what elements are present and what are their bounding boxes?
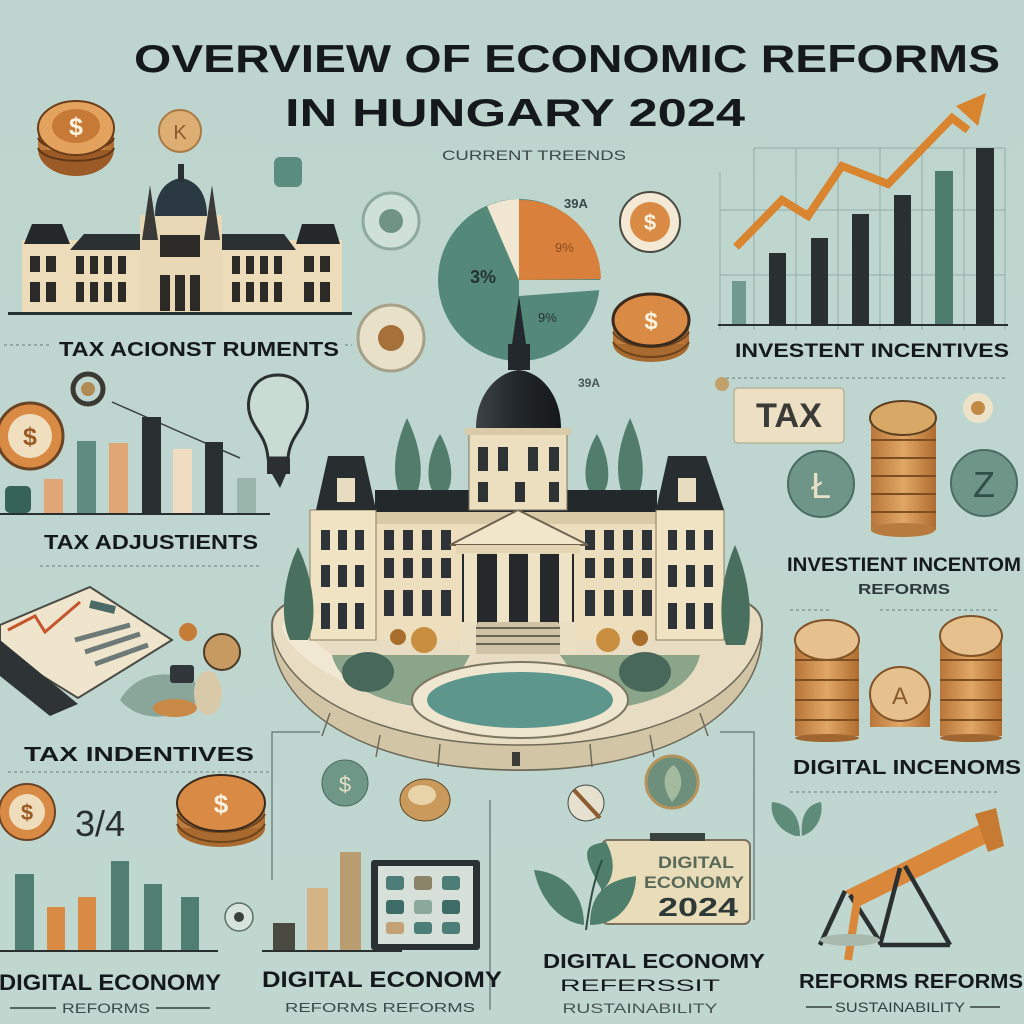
towers	[310, 510, 376, 640]
digital economy 2024 card: ECONOMY	[644, 873, 745, 892]
cypress trees	[395, 418, 421, 490]
icon: small ring	[73, 374, 103, 404]
icon: bottom left coin	[0, 784, 55, 840]
tax sign: TAX	[756, 397, 822, 435]
label: digital economy 2: REFORMS REFORMS	[285, 1000, 475, 1015]
icon: bottom coin stack: $	[214, 789, 229, 819]
icon: green badge	[274, 157, 302, 187]
shrubs	[342, 652, 394, 692]
label: digital economy 2: DIGITAL ECONOMY	[262, 967, 502, 992]
label: tax adjustients: TAX ADJUSTIENTS	[44, 532, 258, 554]
icon: green coin: $	[339, 772, 351, 797]
portico	[462, 540, 574, 625]
icon: coin stack near pie: $	[644, 308, 658, 335]
illustration: financial document	[0, 587, 240, 717]
illustration: oil pump	[820, 808, 1004, 960]
icon: tablet dashboard	[371, 860, 480, 950]
icon: top-left coin stack: $	[69, 113, 83, 141]
label: digital economy 3	[543, 951, 766, 1016]
icon: nut coin	[358, 305, 424, 371]
windows	[321, 530, 713, 629]
subheading: current trends: CURRENT TREENDS	[442, 147, 626, 163]
label: digital economy 3: REFERSSIT	[560, 976, 720, 995]
label: digital economy 3: DIGITAL ECONOMY	[543, 951, 766, 973]
digital economy 2024 card: DIGITAL	[658, 853, 734, 872]
label: digital economy 2	[262, 967, 502, 1015]
label: 3/4: 3/4	[75, 803, 125, 844]
icon: green coins: Ł	[811, 465, 831, 506]
icon: small gold coin	[159, 110, 201, 152]
title: OVERVIEW OF ECONOMIC REFORMS	[134, 38, 1000, 81]
label: investent incentives: INVESTENT INCENTIVES	[735, 341, 1009, 362]
bar chart: tax adjustments	[0, 402, 270, 515]
icon: top-left coin stack	[38, 101, 114, 176]
icon: left coin: $	[23, 423, 37, 451]
icon: left coin	[0, 403, 63, 469]
lawn	[332, 655, 470, 710]
wings	[310, 515, 722, 640]
label: digital economy 1: REFORMS	[62, 1000, 150, 1016]
tax sign	[734, 388, 844, 443]
icon: green leaves	[772, 802, 822, 836]
icon: three coin stacks	[795, 616, 1002, 742]
label: digital economy 1	[0, 970, 221, 1016]
flowers	[411, 627, 437, 653]
plinth	[272, 585, 762, 770]
title	[134, 38, 1000, 135]
label: 39a center: 39A	[578, 376, 600, 390]
label: 39a: 39A	[564, 196, 588, 211]
icon: small coin	[225, 903, 253, 931]
pie chart	[438, 199, 602, 361]
icon: green coins: Z	[973, 464, 995, 505]
icon: coin stack near pie	[613, 294, 689, 362]
digital economy 2024 card	[534, 833, 750, 930]
label: reforms reforms sustainability: SUSTAINABILITY	[835, 999, 966, 1015]
label: digital economy 3: RUSTAINABILITY	[562, 1000, 718, 1016]
label: digital economy 1: DIGITAL ECONOMY	[0, 970, 221, 995]
main illustration: central building	[272, 296, 762, 770]
icon: coin near pie: $	[644, 210, 656, 235]
bar chart: top right	[718, 93, 1008, 330]
icon: lightbulb	[248, 375, 308, 488]
icon: outlined circle	[363, 193, 419, 249]
connector lines	[272, 732, 754, 1010]
bar chart: bottom centre	[262, 852, 402, 952]
pie chart: 3%	[470, 267, 496, 287]
label: tax indentives: TAX INDENTIVES	[24, 744, 254, 766]
title: IN HUNGARY 2024	[285, 92, 745, 135]
label: tax acionst: TAX ACIONST RUMENTS	[59, 339, 339, 361]
icon: bottom left coin: $	[21, 800, 33, 825]
label: investent incentom reforms: REFORMS	[858, 581, 950, 598]
icon: gold nugget coin	[400, 779, 450, 821]
label: investent incentom reforms: INVESTIENT INCENTOM	[787, 555, 1021, 576]
label: investent incentom reforms	[787, 555, 1021, 598]
icon: coin near pie	[620, 192, 680, 252]
bar chart: bottom left	[0, 861, 218, 952]
label: reforms reforms sustainability	[799, 971, 1023, 1015]
icon: green coin	[322, 760, 368, 806]
digital economy 2024 card: 2024	[658, 892, 739, 922]
illustration: parliament building left	[8, 164, 352, 315]
icon: bottom coin stack	[177, 775, 265, 847]
icon: three coin stacks: A	[892, 683, 908, 710]
icon: tall coin stack right	[870, 401, 936, 537]
label: digital incenoms: DIGITAL INCENOMS	[793, 757, 1021, 779]
icon: small gold coin: K	[173, 122, 187, 144]
pie chart: 9%	[538, 310, 557, 325]
pie chart: 9%	[555, 240, 574, 255]
icon: green coins	[788, 450, 1017, 517]
label: reforms reforms sustainability: REFORMS REFORMS	[799, 971, 1023, 993]
pool	[412, 662, 628, 738]
dome drum	[469, 430, 567, 510]
icon: leaf coin pair	[568, 756, 698, 821]
icon: small bulb coin	[715, 377, 993, 423]
